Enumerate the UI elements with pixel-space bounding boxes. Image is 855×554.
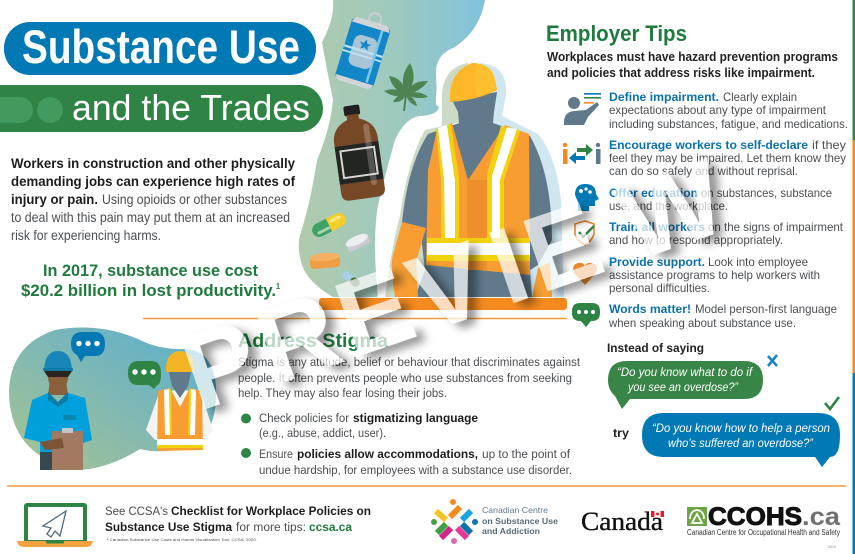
icon: white pill [344, 231, 371, 253]
icon: green check [825, 397, 839, 409]
intro paragraph: Using opioids or other substances [102, 192, 287, 207]
tip: offer education: use, and the workplace. [609, 199, 728, 213]
tip: words matter: Model person-first language [695, 302, 837, 316]
tip: define impairment: including substances, fatigue, and medications. [609, 117, 848, 131]
icon: medicine bottle [329, 102, 386, 202]
title [0, 20, 323, 132]
icon: head with gears [575, 184, 599, 211]
logo: CCOHS: .ca [802, 503, 841, 531]
bullet: stigmatizing language: stigmatizing language [353, 411, 478, 425]
footer: checklist text: Checklist for Workplace Policies on [171, 504, 371, 518]
logo: CCSA [432, 500, 558, 542]
logo: CCOHS: 2020-XX [828, 545, 836, 549]
icon: speech bubble [572, 303, 600, 327]
watermark: PREVIEW: PREVIEW [167, 135, 739, 433]
tip: train workers: on the signs of impairment [708, 220, 844, 234]
icon: cannabis leaf [384, 63, 428, 111]
icon: heart [573, 263, 597, 285]
worker in vest [146, 351, 213, 451]
worker body [402, 92, 552, 297]
intro paragraph: to deal with this pain may put them at an increased [11, 210, 290, 225]
footer: checklist text: ¹ Canadian Substance Use Costs and Harms Visualization Tool. CCSA, 2020. [107, 537, 257, 542]
tip: provide support [609, 255, 820, 295]
green speech bubble: “Do you know what to do if [617, 365, 754, 379]
icon: capsule [310, 211, 348, 239]
illustration: substances [309, 7, 428, 288]
tip: provide support: assistance programs to help workers with [609, 268, 820, 282]
footer: checklist text: Substance Use Stigma [105, 520, 232, 534]
tip: train workers: Train all workers [609, 220, 705, 234]
gloves [392, 222, 426, 297]
tip: define impairment [609, 90, 848, 131]
tip: words matter: Words matter! [609, 302, 691, 316]
statistic callout: In 2017, substance use cost [43, 262, 258, 280]
label: try: try [613, 426, 629, 440]
statistic callout: 1 [276, 282, 280, 291]
statistic callout [21, 262, 280, 300]
heading: Employer Tips [546, 21, 687, 46]
tip: self-declare: if they [812, 138, 846, 152]
blue speech bubble [642, 413, 840, 467]
panel: employer tips [546, 21, 848, 330]
illustration: worker with vest [377, 58, 564, 297]
tip: self-declare: Encourage workers to self-declare [609, 138, 808, 152]
body text: Stigma is any attitude, belief or behaviour that discriminates against [238, 355, 581, 369]
statistic callout: $20.2 billion in lost productivity. [21, 282, 276, 300]
heading: Address Stigma [238, 331, 388, 352]
tip: self-declare [609, 138, 846, 178]
speech bubble: green [128, 361, 161, 389]
panel: language examples [607, 341, 840, 467]
tip: define impairment: expectations about any type of impairment [609, 103, 827, 117]
green speech bubble [608, 361, 763, 409]
intro text [547, 50, 838, 80]
body text: help. They may also fear losing their jobs. [238, 386, 447, 400]
bullet: stigmatizing language: Check policies for [259, 411, 349, 425]
bullet: policies allow accommodations [241, 447, 572, 477]
bullet: policies allow accommodations: up to the point of [482, 447, 571, 461]
speech bubble: blue [71, 332, 105, 362]
helmet [450, 63, 497, 102]
title: Substance Use [22, 20, 300, 73]
bullet: policies allow accommodations: undue hardship, for employees with a substance use disorder. [259, 463, 572, 477]
icon: blue cross [768, 355, 777, 366]
icon: presenter [564, 93, 601, 125]
footer: checklist text: See CCSA's [105, 504, 168, 518]
footer: laptop icon [17, 503, 93, 547]
footer: checklist text [105, 504, 371, 542]
watermark: PREVIEW: PREVIEW [167, 135, 739, 433]
logo: CCOHS: CCOHS [708, 503, 802, 531]
footer: checklist text: ccsa.ca [309, 520, 352, 534]
man with clipboard [24, 351, 92, 470]
right edge colour bar [852, 0, 855, 554]
label: instead of saying: Instead of saying [607, 341, 704, 355]
bullet: policies allow accommodations: policies allow accommodations, [297, 447, 478, 461]
icon: shield check [575, 221, 594, 245]
orange shelf bar [319, 298, 567, 310]
logo: CCSA: and Addiction [482, 527, 540, 536]
icon: small capsule [341, 270, 361, 288]
intro text: Workplaces must have hazard prevention programs [547, 50, 838, 64]
body text [238, 355, 581, 400]
green speech bubble: you see an overdose?” [627, 380, 739, 394]
tip: define impairment: Define impairment. [609, 90, 719, 104]
panel: address stigma [238, 331, 581, 477]
blue speech bubble: who’s suffered an overdose?” [668, 436, 814, 450]
tip: words matter [608, 302, 837, 330]
intro paragraph: demanding jobs can experience high rates of [11, 174, 295, 189]
logo: CCOHS [687, 503, 841, 549]
tip: offer education: on substances, substance [701, 186, 832, 200]
tip: self-declare: can do so safely and without reprisal. [609, 164, 798, 178]
intro paragraph: injury or pain. [11, 192, 98, 207]
body text: people. It often prevents people who use substances from seeking [238, 371, 572, 385]
tip: words matter: when speaking about substance use. [608, 316, 796, 330]
icon: beer can [334, 7, 394, 90]
tip: offer education [609, 186, 832, 213]
bullet: policies allow accommodations: Ensure [259, 447, 293, 461]
tip: provide support: Look into employee [708, 255, 808, 269]
tip: train workers [609, 220, 844, 247]
intro paragraph: risk for experiencing harms. [11, 228, 161, 243]
bullet: stigmatizing language: (e.g., abuse, addict, user). [259, 426, 386, 440]
illustration: blob background [299, 0, 485, 297]
illustration: two workers talking [9, 328, 216, 470]
logo: Canada wordmark: Canada [581, 507, 663, 536]
intro text: and policies that address risks like impairment. [547, 66, 815, 80]
footer: checklist text: for more tips: [236, 520, 306, 534]
tip: define impairment: Clearly explain [723, 90, 797, 104]
bullet: stigmatizing language [241, 411, 478, 440]
icon: orange pill [309, 252, 340, 269]
vest [426, 123, 530, 275]
intro paragraph: Workers in construction and other physically [11, 156, 295, 171]
intro paragraph [11, 156, 295, 243]
icon: exchange arrows [563, 143, 600, 164]
tip: provide support: Provide support. [609, 255, 705, 269]
logo: CCSA: Canadian Centre [482, 506, 548, 515]
tip: train workers: and how to respond appropriately. [609, 233, 783, 247]
blue speech bubble: “Do you know how to help a person [652, 421, 830, 435]
tip: provide support: personal difficulties. [609, 281, 710, 295]
tip: offer education: Offer education [609, 186, 698, 200]
title: and the Trades [72, 87, 310, 128]
tip: self-declare: feel they may be impaired. Let them know they [609, 151, 846, 165]
logo: CCSA: on Substance Use [482, 517, 558, 526]
